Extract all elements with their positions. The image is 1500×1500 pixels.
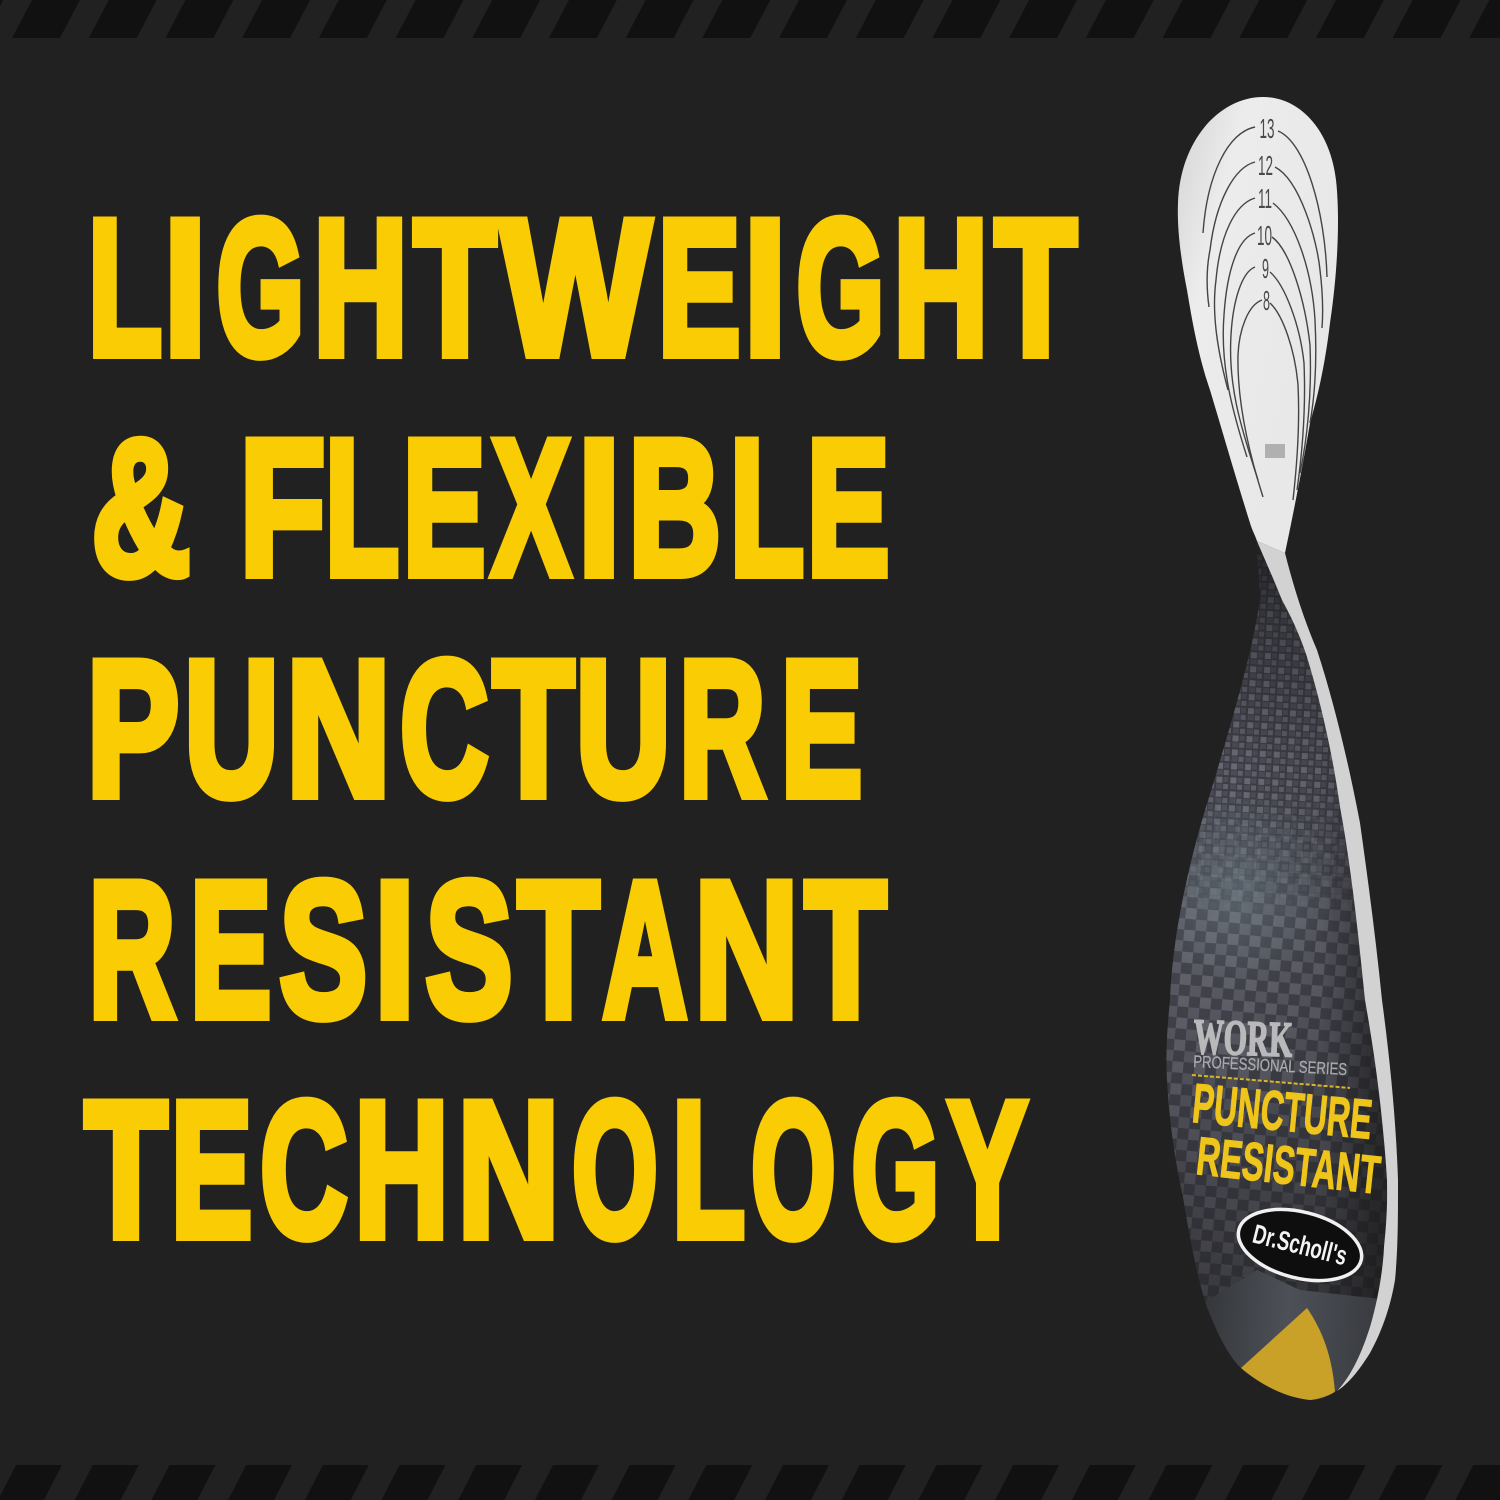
headline line 4: T (805, 842, 886, 1057)
headline line 4: I (375, 842, 415, 1057)
headline line 4: A (603, 842, 687, 1057)
headline line 1: G (797, 180, 884, 395)
headline line 5: T (85, 1062, 167, 1277)
size arc 11 (1214, 198, 1316, 423)
yellow heel tip (1241, 1308, 1335, 1400)
size numbers: 9 (1262, 253, 1269, 284)
brand oval logo: Dr.Scholl's (1250, 1219, 1350, 1271)
headline line 3: U (576, 621, 671, 836)
size numbers: 12 (1258, 150, 1273, 181)
size arc 12 (1207, 162, 1323, 328)
headline line 5: Y (948, 1062, 1027, 1277)
headline line 5: H (354, 1062, 449, 1277)
headline line 1: I (744, 180, 786, 395)
headline line 4: T (518, 842, 599, 1057)
size numbers: 8 (1263, 285, 1270, 316)
size arc 10 (1223, 233, 1310, 473)
size numbers (1257, 113, 1274, 316)
product: twisted insole (1160, 97, 1400, 1410)
professional series label: PROFESSIONAL SERIES (1193, 1052, 1348, 1079)
top hazard stripe band (0, 0, 1500, 38)
headline line 1: T (995, 180, 1077, 395)
insole side band (1257, 541, 1398, 1391)
headline line 5: G (852, 1062, 939, 1277)
headline line 4: S (280, 842, 367, 1057)
headline line 2: F (240, 400, 325, 615)
headline line 4: N (694, 842, 798, 1057)
insole white top face with size arcs (1178, 97, 1338, 553)
bottom hazard stripe band (0, 1465, 1500, 1500)
headline line 2: L (730, 400, 804, 615)
headline line 1: G (217, 180, 304, 395)
size arc 9 (1231, 267, 1305, 490)
insole white top face with size arcs: 13 (1260, 113, 1274, 144)
headline line 4: E (190, 842, 271, 1057)
headline line 1: H (314, 180, 408, 395)
headline line 4: S (426, 842, 512, 1057)
resistant label: RESISTANT (1194, 1126, 1383, 1206)
headline line 3: E (781, 621, 862, 836)
small print mark (1265, 444, 1285, 458)
headline line 2: I (578, 400, 620, 615)
headline line 2: E (403, 400, 485, 615)
size numbers: 11 (1258, 183, 1272, 214)
headline line 3: P (87, 621, 179, 836)
work label: WORK (1193, 1008, 1294, 1067)
headline line 3: R (679, 621, 765, 836)
headline line 2: L (325, 400, 399, 615)
headline line 1: H (893, 180, 988, 395)
headline line 3: C (400, 621, 488, 836)
headline line 5: L (672, 1062, 745, 1277)
headline line 5: N (458, 1062, 559, 1277)
size arc 8 (1238, 300, 1299, 500)
puncture label: PUNCTURE (1190, 1071, 1375, 1151)
size arc 13 (1203, 127, 1327, 277)
headline line 1: E (658, 180, 740, 395)
headline (85, 180, 1077, 1277)
size numbers: 10 (1257, 220, 1272, 251)
heel panel (1206, 1270, 1377, 1400)
headline line 1: T (414, 180, 496, 395)
headline line 1: I (164, 180, 206, 395)
headline line 2: E (807, 400, 889, 615)
headline line 3: U (184, 621, 279, 836)
headline line 2: X (492, 400, 570, 615)
headline line 1: W (501, 180, 651, 395)
headline line 5: O (572, 1062, 658, 1277)
headline line 4: R (89, 842, 175, 1057)
headline line 2: B (629, 400, 721, 615)
headline line 1: L (88, 180, 162, 395)
headline line 5: E (171, 1062, 252, 1277)
headline line 3: T (493, 621, 574, 836)
brand oval logo (1231, 1198, 1369, 1292)
headline line 3: N (286, 621, 390, 836)
dashed yellow divider (1192, 1075, 1350, 1088)
insole underside with carbon weave (1160, 540, 1400, 1410)
headline line 5: C (260, 1062, 347, 1277)
headline line 2: & (92, 400, 190, 615)
headline line 5: O (751, 1062, 836, 1277)
